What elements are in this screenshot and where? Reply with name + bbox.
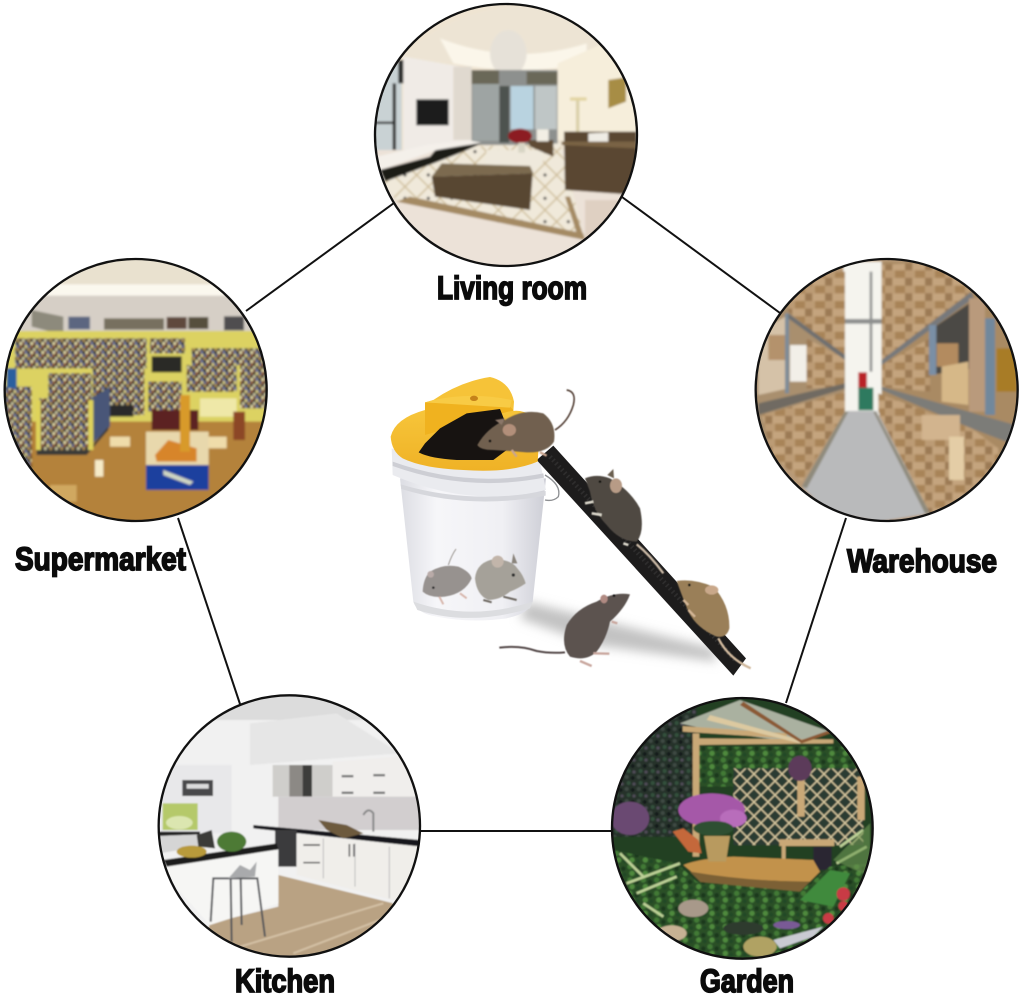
purple bush [611,802,649,835]
left racking [757,306,846,466]
pergola frame [683,715,865,857]
ramp [537,446,746,676]
right wall [558,43,637,140]
terracotta watering can [673,828,702,853]
TV [416,99,449,125]
left window [376,62,402,151]
lid [391,377,540,471]
wall pictures [68,317,90,329]
bucket handle [545,475,559,500]
yellow rim [391,410,540,471]
mouse climbing upper ramp [585,469,663,573]
sky above pergola [680,700,830,743]
right racking [880,260,1016,456]
floor shadow [520,602,717,662]
floor [200,875,393,957]
blue display [146,432,209,466]
center product: bucket trap with mice and ramp [391,377,751,676]
foreground plants [613,850,870,963]
stones [678,900,708,917]
photo circle: warehouse [745,255,1024,528]
shelving [0,331,273,422]
tall unit [160,765,232,833]
circle outline [375,4,637,266]
far sofa and flowers [527,140,553,157]
bench [779,839,834,846]
end wall of the aisle [843,262,885,415]
upper cabinets [333,755,417,797]
aisle floor [802,411,930,522]
circle outline [5,259,267,521]
dark opening [419,409,507,460]
mid foliage [697,747,870,787]
right sofa [564,132,637,195]
base cabinets [296,834,418,866]
trapped mouse left [423,549,472,604]
backsplash [278,797,420,830]
shelf beam [882,387,1015,445]
mouse climbing lower ramp [677,580,751,668]
white flowers [773,927,823,948]
purple flowers [678,793,745,827]
TV cabinet [380,143,482,182]
hood [273,765,333,797]
floor [377,148,401,157]
bucket [392,448,559,620]
trapped mouse right [475,553,526,602]
mouse on top of lid [477,390,574,457]
label: warehouse: Warehouse [847,543,997,579]
mouse standing on the floor [499,594,630,666]
back counter [253,825,420,847]
stool [211,878,265,942]
photo circle: supermarket [0,255,273,528]
mice inside the bucket [423,549,526,604]
left display [39,398,91,450]
label: living room: Living room [437,270,587,306]
photo circle: living room [370,0,650,273]
coffee table [483,150,543,170]
tap [363,810,373,832]
ceiling [400,7,613,69]
back windows [472,70,558,145]
label: supermarket: Supermarket [15,541,186,577]
photo circle: kitchen [150,690,430,963]
island [209,848,280,926]
circle outline [612,698,873,959]
photo circle: garden [600,690,887,963]
flower pot [704,836,730,862]
oven [275,830,297,867]
counter objects [217,832,246,852]
left wall [402,57,456,150]
ottoman [432,163,533,177]
lattice [733,768,863,845]
right foreground [800,870,850,907]
connector lines between location circles [178,197,846,831]
cheese flap [425,377,514,432]
red counter [152,410,198,430]
hanging basket [788,756,812,781]
circle outline [756,259,1018,521]
circle outline [159,695,420,957]
lower boxes [878,393,998,522]
floor [34,423,260,520]
red flowers [837,887,850,901]
wooden deck [683,857,820,882]
soffit [250,713,400,765]
